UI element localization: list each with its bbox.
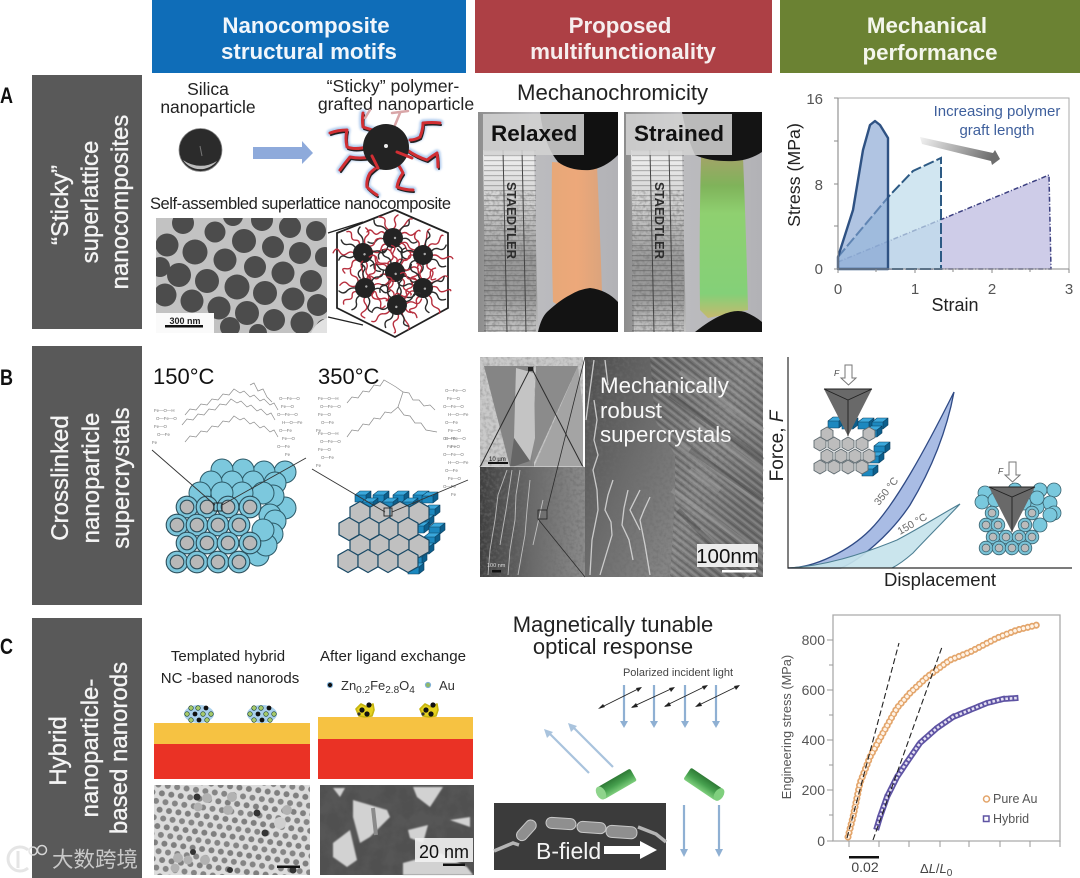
header: proposed multifunctionality: multifunctionality [530, 39, 716, 64]
row C structure panel [154, 648, 474, 875]
y axis tick labels: 400 [802, 732, 825, 748]
legend: Zn ferrite and Au nanoparticles: Zn [341, 678, 356, 693]
indented crosslinked crystal [814, 365, 890, 476]
side panel: sticky superlattice nanocomposites [32, 75, 142, 329]
photo: relaxed specimen: Relaxed [491, 121, 577, 146]
polymer-grafted nanoparticle [330, 110, 441, 197]
strain scale bar: 0.02 [851, 859, 879, 875]
150 C molecular structure [152, 383, 303, 457]
micrograph: after ligand exchange [320, 785, 474, 875]
watermark text: 大数跨境 [52, 848, 138, 872]
SEM lower left: fracture surface: 100 nm [487, 563, 506, 569]
y axis tick labels: 800 [802, 632, 825, 648]
silica nanoparticle image [179, 128, 222, 172]
side panel: sticky superlattice nanocomposites: “Sticky” [47, 165, 74, 245]
header: nanocomposite structural motifs: structural motifs [221, 39, 397, 64]
legend: pure Au and hybrid: Pure Au [993, 792, 1038, 806]
loop: 150 C [788, 504, 960, 568]
transmitted light arrows [680, 805, 723, 857]
side panel: crosslinked nanoparticle supercrystals: nanoparticle [78, 413, 105, 543]
series: hybrid [877, 698, 1017, 827]
row label B: B [0, 366, 13, 390]
y axis title: Engineering stress (MPa) [779, 655, 794, 799]
indented crosslinked crystal: F [834, 368, 840, 378]
side panel: hybrid nanoparticle-based nanorods: nanoparticle- [77, 679, 104, 817]
legend: pure Au and hybrid: Hybrid [993, 812, 1029, 826]
loop label: 350 C: 350 °C [872, 475, 901, 508]
row label C: C [0, 635, 13, 659]
curve: shortest graft [838, 121, 888, 269]
loop: 350 C [788, 392, 954, 568]
nanorod: tilted left [594, 768, 637, 801]
350 C molecular structure [316, 380, 469, 497]
header: mechanical performance [780, 0, 1080, 73]
curve: medium graft [838, 158, 941, 269]
legend: Zn ferrite and Au nanoparticles: 0.2 [356, 685, 371, 696]
x axis tick labels: 2 [988, 281, 996, 298]
row A structural motifs panel [150, 76, 474, 342]
grafted nanoparticle label: grafted nanoparticle [318, 94, 474, 114]
scale bar: 20 nm: 20 nm [419, 842, 469, 862]
y axis tick labels: 0 [815, 261, 823, 278]
side panel: hybrid nanoparticle-based nanorods [32, 618, 142, 878]
350 C label: 350°C [318, 364, 380, 389]
arrow: silica to grafted nanoparticle [253, 141, 313, 164]
350 C hexagonal crosslinked supercrystal [312, 469, 468, 574]
scale bar: 100 nm: 100nm [696, 545, 759, 568]
y axis tick labels: 16 [806, 91, 823, 108]
header: proposed multifunctionality: Proposed [569, 13, 671, 38]
150 C sphere packed supercrystal [152, 450, 306, 573]
side panel: crosslinked nanoparticle supercrystals [32, 346, 142, 605]
SEM inset: pillar [480, 357, 583, 468]
x axis tick labels: 3 [1065, 281, 1073, 298]
photo: relaxed specimen [478, 112, 618, 332]
ligand exchanged nanorod cross-section [318, 702, 473, 779]
B-field label: B-field [536, 838, 601, 864]
row B structure panel [152, 364, 469, 574]
after ligand exchange label: After ligand exchange [320, 648, 466, 665]
legend: Zn ferrite and Au nanoparticles [327, 678, 455, 696]
annotation: increasing polymer graft length: Increasing polymer [934, 103, 1060, 120]
x axis title: ΔL/L [920, 861, 947, 876]
side panel: crosslinked nanoparticle supercrystals: Crosslinked [47, 415, 74, 541]
dashed elastic guide lines [847, 643, 942, 840]
header: nanocomposite structural motifs [152, 0, 466, 73]
y axis tick labels: 0 [817, 833, 825, 849]
panel title: optical response [533, 634, 693, 659]
y axis tick labels [806, 91, 823, 278]
indented sphere crystal [975, 462, 1061, 555]
magnetically tunable optical response panel [494, 612, 740, 870]
header: mechanical performance: performance [862, 40, 998, 65]
templated hybrid label: NC -based nanorods [161, 670, 299, 687]
header: nanocomposite structural motifs: Nanocomposite [222, 13, 390, 38]
arrow: increasing graft length [920, 137, 1000, 165]
stress-strain chart, hybrid nanorods [779, 615, 1060, 878]
superlattice micrograph: 300 nm [169, 316, 201, 326]
series: pure Au [848, 625, 1037, 837]
incident light arrows [620, 685, 720, 728]
photo: strained specimen [624, 112, 762, 332]
y axis tick labels: 8 [815, 177, 823, 194]
reflected light arrows [544, 723, 613, 773]
row label A: A [0, 84, 13, 108]
legend: Zn ferrite and Au nanoparticles: O [399, 678, 409, 693]
image caption: Mechanically [600, 373, 730, 398]
panel title: Magnetically tunable [513, 612, 713, 637]
grafted nanoparticle label: “Sticky” polymer- [327, 76, 459, 96]
x axis tick labels [834, 281, 1073, 298]
photo: strained specimen: STAEDTLER [652, 182, 667, 260]
indented sphere crystal: F [998, 466, 1004, 476]
photo: relaxed specimen: STAEDTLER [504, 182, 519, 260]
polarization double arrows [598, 685, 740, 709]
y axis tick labels: 600 [802, 682, 825, 698]
photo: strained specimen: Strained [634, 121, 724, 146]
curve: longest graft [838, 175, 1051, 269]
nanorod: tilted right [683, 768, 727, 803]
mechanochromicity title: Mechanochromicity [517, 80, 709, 105]
legend: Zn ferrite and Au nanoparticles: Au [439, 678, 455, 693]
header: mechanical performance: Mechanical [867, 13, 987, 38]
SEM lower left: fracture surface [480, 357, 585, 577]
B-field micrograph [494, 803, 666, 870]
side panel: hybrid nanoparticle-based nanorods: Hybrid [45, 716, 72, 786]
annotation: increasing polymer graft length: graft length [959, 122, 1035, 139]
header: proposed multifunctionality [475, 0, 772, 73]
side panel: sticky superlattice nanocomposites: nanocomposites [107, 115, 134, 289]
image caption: supercrystals [600, 422, 731, 447]
y axis tick labels: 200 [802, 782, 825, 798]
superlattice hexagon schematic [326, 210, 460, 338]
legend: Zn ferrite and Au nanoparticles: 4 [409, 685, 415, 696]
y axis title: Stress (MPa) [784, 123, 804, 227]
legend: Zn ferrite and Au nanoparticles: Fe [370, 678, 385, 693]
templated hybrid label: Templated hybrid [171, 648, 285, 665]
side panel: crosslinked nanoparticle supercrystals: supercrystals [108, 407, 135, 549]
micrograph: templated nanocrystals [154, 785, 310, 875]
superlattice micrograph [156, 218, 327, 333]
silica nanoparticle label: nanoparticle [160, 97, 256, 117]
templated nanorod cross-section [154, 705, 310, 779]
watermark logo [8, 846, 46, 871]
side panel: hybrid nanoparticle-based nanorods: based nanorods [106, 662, 133, 834]
150 C label: 150°C [153, 364, 215, 389]
B-field arrow [604, 841, 657, 859]
SEM inset: pillar: 10 µm [489, 457, 506, 463]
x axis tick labels: 1 [911, 281, 919, 298]
legend: pure Au and hybrid [984, 792, 1038, 826]
scale bar: 20 nm [415, 838, 473, 866]
superlattice label: Self-assembled superlattice nanocomposite [150, 195, 451, 213]
loop label: 150 C: 150 °C [896, 511, 930, 538]
side panel: sticky superlattice nanocomposites: superlattice [77, 141, 104, 263]
polarized light label: Polarized incident light [623, 667, 733, 679]
x axis title: Strain [931, 295, 979, 315]
SEM micrographs: mechanically robust supercrystals [480, 357, 763, 577]
stress-strain chart, sticky superlattices [784, 91, 1073, 315]
x axis title: Displacement [884, 569, 996, 590]
y axis tick labels [802, 632, 825, 849]
y axis title: Force, F [767, 409, 788, 481]
image caption: robust [600, 398, 663, 423]
silica nanoparticle label: Silica [187, 79, 229, 99]
x axis tick labels: 0 [834, 281, 842, 298]
SEM main image [585, 357, 763, 577]
legend: Zn ferrite and Au nanoparticles: 2.8 [385, 685, 400, 696]
force-displacement chart, crosslinked supercrystals [767, 357, 1072, 590]
